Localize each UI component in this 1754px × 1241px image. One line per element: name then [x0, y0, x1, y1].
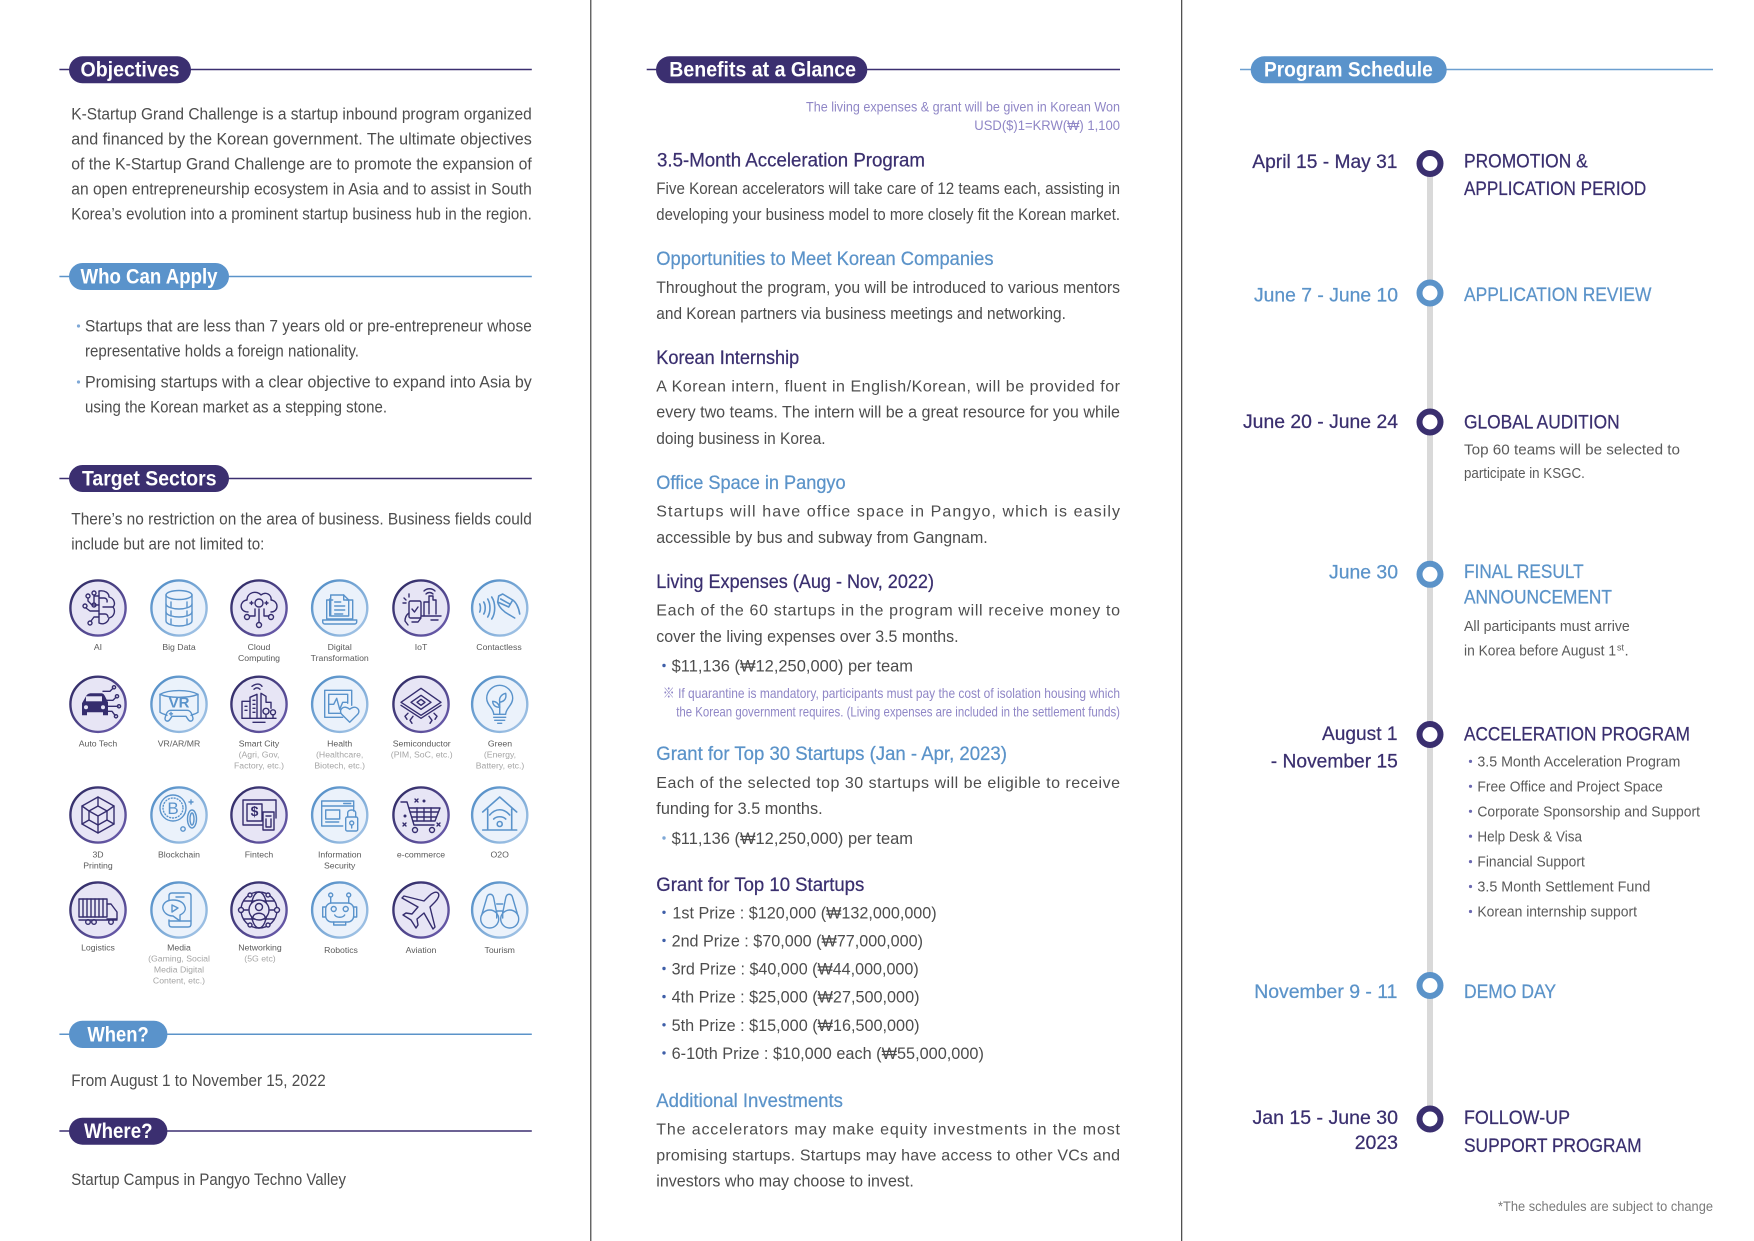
- icon: Logistics: [70, 882, 126, 952]
- icon: Health: [312, 677, 367, 770]
- icon: Blockchain: B: [167, 799, 179, 818]
- icon: AI: [70, 580, 126, 652]
- heading: Benefits at a Glance: Benefits at a Glance: [669, 58, 856, 82]
- milestone: acceleration program: Help Desk & Visa: [1477, 828, 1583, 846]
- block: additional investments: Additional Investments: [656, 1090, 843, 1112]
- icon: Networking: [231, 882, 287, 964]
- milestone: promotion: APPLICATION PERIOD: [1464, 178, 1646, 200]
- heading: Who Can Apply: [59, 263, 532, 290]
- list: eligibility: Startups that are less than 7 years old or pre-entrepreneur whose: [85, 318, 532, 336]
- icon: 3D Printing: [70, 787, 126, 870]
- icon: Robotics: [312, 882, 367, 955]
- icon: Tourism: Tourism: [484, 945, 515, 955]
- milestone: follow-up: Jan 15 - June 30: [1252, 1107, 1398, 1129]
- icon: VR/AR/MR: VR/AR/MR: [158, 738, 200, 748]
- icon: e-commerce: [393, 787, 449, 860]
- icon: Robotics: Robotics: [324, 945, 359, 955]
- block: meet Korean companies: [656, 248, 1120, 323]
- milestone: demo day: DEMO DAY: [1464, 981, 1556, 1003]
- icon: Cloud Computing: [231, 580, 287, 663]
- icon: Auto Tech: Auto Tech: [79, 738, 117, 748]
- icon: Smart City: [231, 677, 287, 770]
- note: currency: [806, 98, 1120, 133]
- icon: e-commerce: e-commerce: [397, 850, 445, 860]
- text: target sectors intro: include but are not limited to:: [71, 536, 264, 554]
- panel: program schedule: [1240, 56, 1713, 1214]
- block: grant top 10: 1st Prize : $120,000 (₩132,000,000): [672, 904, 937, 922]
- icon: Green: [472, 677, 527, 770]
- milestone: acceleration program: Free Office and Project Space: [1477, 778, 1663, 796]
- block: acceleration program: Five Korean accelerators will take care of 12 teams each, assisting in: [656, 180, 1120, 198]
- icon: Networking: (5G etc): [244, 954, 276, 964]
- note: currency: The living expenses & grant will be given in Korean Won: [806, 98, 1120, 114]
- icon: IoT: IoT: [415, 642, 428, 652]
- block: grant top 30: [656, 743, 1120, 848]
- icon: Smart City: (Agri, Gov,: [239, 750, 279, 760]
- block: grant top 10: [656, 874, 984, 1063]
- icon: Blockchain: [151, 787, 207, 860]
- block: office space: Startups will have office space in Pangyo, which is easily: [656, 504, 1120, 520]
- block: acceleration program: developing your business model to more closely fit the Korean market.: [656, 206, 1120, 224]
- icon: Digital Transformation: Digital: [328, 642, 352, 652]
- heading: Benefits at a Glance: [647, 56, 1120, 83]
- block: living expenses: Each of the 60 startups in the program will receive money to: [656, 602, 1120, 620]
- heading: Objectives: [59, 56, 532, 83]
- note: currency: USD($)1=KRW(₩) 1,100: [974, 117, 1120, 133]
- milestone: final result: .: [1624, 642, 1629, 660]
- block: grant top 30: funding for 3.5 months.: [656, 800, 823, 818]
- block: living expenses: the Korean government requires. (Living expenses are included in the settlement funds): [676, 704, 1120, 720]
- heading: When?: When?: [87, 1023, 149, 1046]
- text: when: From August 1 to November 15, 2022: [71, 1072, 326, 1090]
- milestone: demo day: November 9 - 11: [1254, 981, 1398, 1003]
- block: Korean internship: A Korean intern, fluent in English/Korean, will be provided for: [656, 378, 1121, 396]
- milestone: promotion: PROMOTION &: [1464, 150, 1588, 172]
- text: objectives description: Korea’s evolution into a prominent startup business hub in the region.: [71, 206, 532, 224]
- milestone: global audition: Top 60 teams will be selected to: [1464, 442, 1680, 458]
- icon: Green: Battery, etc.): [476, 760, 524, 770]
- milestone: final result: in Korea before August 1: [1464, 642, 1616, 660]
- icon: Digital Transformation: [311, 580, 369, 663]
- icon: Aviation: Aviation: [406, 945, 437, 955]
- milestone: demo day: [1254, 975, 1556, 1003]
- milestone: final result: [1329, 561, 1630, 660]
- heading: Who Can Apply: Who Can Apply: [80, 266, 218, 288]
- icon: VR/AR/MR: [151, 677, 207, 748]
- icon: O2O: O2O: [491, 850, 509, 860]
- icon: O2O: [472, 787, 527, 860]
- icon: Information Security: Security: [324, 860, 356, 870]
- milestone: follow-up: 2023: [1355, 1132, 1398, 1154]
- milestone: application review: [1254, 282, 1652, 306]
- heading: Program Schedule: [1240, 56, 1713, 83]
- block: additional investments: [656, 1090, 1121, 1190]
- block: living expenses: [656, 571, 1120, 720]
- milestone: acceleration program: Korean internship support: [1477, 904, 1638, 920]
- block: additional investments: promising startups. Startups may have access to other VCs and: [656, 1148, 1120, 1164]
- block: living expenses: cover the living expenses over 3.5 months.: [656, 628, 959, 646]
- heading: Target Sectors: Target Sectors: [82, 468, 216, 490]
- icon: Media: Media: [167, 942, 191, 952]
- milestone: global audition: [1243, 411, 1680, 482]
- text: objectives description: and financed by the Korean government. The ultimate objectives: [71, 130, 532, 148]
- icon: Contactless: [472, 580, 527, 652]
- icon: Auto Tech: [70, 677, 126, 748]
- milestone: application review: June 7 - June 10: [1254, 284, 1398, 306]
- icon: Blockchain: Blockchain: [158, 850, 200, 860]
- icon: Fintech: $: [251, 803, 259, 819]
- icon: Media: Content, etc.): [153, 976, 205, 986]
- milestone: final result: FINAL RESULT: [1464, 561, 1584, 583]
- milestone: global audition: GLOBAL AUDITION: [1464, 412, 1620, 434]
- milestone: promotion: [1252, 150, 1646, 200]
- icon: Smart City: Smart City: [239, 738, 280, 748]
- heading: Where?: Where?: [84, 1120, 152, 1143]
- block: Korean internship: doing business in Korea.: [656, 430, 826, 448]
- block: living expenses: ※ If quarantine is mandatory, participants must pay the cost of isolation housing which: [663, 685, 1120, 701]
- milestone: final result: June 30: [1329, 562, 1398, 584]
- block: additional investments: investors who may choose to invest.: [656, 1172, 914, 1190]
- milestone: acceleration program: 3.5 Month Acceleration Program: [1477, 754, 1680, 770]
- milestone: global audition: participate in KSGC.: [1464, 465, 1585, 482]
- milestone: acceleration program: Financial Support: [1477, 854, 1586, 870]
- icon: Semiconductor: Semiconductor: [393, 738, 451, 748]
- block: living expenses: Living Expenses (Aug - Nov, 2022): [656, 571, 934, 593]
- icon: Media: [148, 882, 210, 986]
- block: additional investments: The accelerators may make equity investments in the most: [656, 1122, 1121, 1138]
- list: eligibility: [77, 318, 533, 416]
- icon: Cloud Computing: Cloud: [248, 642, 271, 652]
- icon: IoT: [393, 580, 449, 652]
- list: eligibility: using the Korean market as a stepping stone.: [85, 398, 387, 416]
- icon: 3D Printing: Printing: [83, 860, 113, 870]
- icon: Contactless: Contactless: [476, 642, 522, 652]
- block: meet Korean companies: Opportunities to Meet Korean Companies: [656, 248, 994, 270]
- block: grant top 30: $11,136 (₩12,250,000) per team: [672, 830, 913, 848]
- icon: Fintech: Fintech: [245, 850, 273, 860]
- icon: Health: Biotech, etc.): [314, 760, 365, 770]
- icon: Information Security: [312, 787, 367, 870]
- text: objectives description: [71, 106, 532, 224]
- milestone: final result: st: [1617, 642, 1624, 652]
- block: grant top 30: Each of the selected top 30 startups will be eligible to receive: [656, 775, 1120, 792]
- block: grant top 10: Grant for Top 10 Startups: [656, 874, 865, 896]
- milestone: final result: All participants must arrive: [1464, 618, 1630, 635]
- heading: Objectives: Objectives: [80, 58, 180, 82]
- icon: 3D Printing: 3D: [92, 850, 104, 860]
- icon: Digital Transformation: Transformation: [311, 653, 369, 663]
- block: grant top 10: 2nd Prize : $70,000 (₩77,000,000): [672, 932, 923, 950]
- milestone: acceleration program: August 1: [1322, 723, 1398, 745]
- block: acceleration program: [656, 150, 1120, 224]
- icon: Logistics: Logistics: [81, 942, 116, 952]
- panel: benefits: [647, 56, 1121, 1190]
- block: acceleration program: 3.5-Month Acceleration Program: [657, 150, 925, 172]
- block: office space: Office Space in Pangyo: [656, 472, 846, 494]
- block: meet Korean companies: Throughout the program, you will be introduced to various mentors: [656, 279, 1120, 297]
- icon: Green: Green: [488, 738, 512, 748]
- icon: Fintech: [231, 787, 287, 860]
- icon: Health: Health: [327, 738, 352, 748]
- block: grant top 10: 3rd Prize : $40,000 (₩44,000,000): [672, 960, 919, 978]
- milestone: follow-up: [1252, 1107, 1642, 1157]
- list: eligibility: representative holds a foreign nationality.: [85, 342, 359, 360]
- text: target sectors intro: There’s no restriction on the area of business. Business fields could: [71, 510, 532, 528]
- icon: Tourism: [472, 882, 527, 955]
- milestone: acceleration program: - November 15: [1271, 750, 1398, 772]
- block: office space: [656, 472, 1120, 547]
- milestone: follow-up: SUPPORT PROGRAM: [1464, 1135, 1642, 1157]
- icon: Media: Media Digital: [154, 964, 204, 974]
- milestone: acceleration program: ACCELERATION PROGRAM: [1464, 724, 1690, 746]
- heading: Where?: [59, 1118, 532, 1145]
- icon: Networking: Networking: [238, 942, 282, 952]
- icon: Green: (Energy,: [484, 750, 516, 760]
- block: grant top 10: 5th Prize : $15,000 (₩16,500,000): [672, 1017, 920, 1035]
- heading: Program Schedule: Program Schedule: [1264, 58, 1433, 82]
- timeline spine: [1427, 163, 1433, 1119]
- text: objectives description: an open entrepreneurship ecosystem in Asia and to assist in South: [71, 180, 532, 198]
- milestone: acceleration program: Corporate Sponsorship and Support: [1477, 804, 1701, 820]
- icon: Cloud Computing: Computing: [238, 653, 280, 663]
- block: Korean internship: Korean Internship: [656, 347, 799, 369]
- icon: Big Data: [151, 580, 207, 652]
- text: where: Startup Campus in Pangyo Techno Valley: [71, 1171, 347, 1189]
- icon: Semiconductor: [391, 677, 453, 760]
- milestone: follow-up: FOLLOW-UP: [1464, 1107, 1570, 1129]
- block: grant top 10: 4th Prize : $25,000 (₩27,500,000): [672, 988, 920, 1006]
- icon: Smart City: Factory, etc.): [234, 760, 284, 770]
- block: grant top 30: Grant for Top 30 Startups (Jan - Apr, 2023): [656, 743, 1007, 765]
- list: eligibility: Promising startups with a clear objective to expand into Asia by: [85, 374, 533, 392]
- milestone: global audition: June 20 - June 24: [1243, 411, 1398, 433]
- milestone: application review: APPLICATION REVIEW: [1464, 284, 1652, 306]
- text: objectives description: of the K-Startup Grand Challenge are to promote the expansion of: [71, 156, 532, 174]
- block: Korean internship: every two teams. The intern will be a great resource for you while: [656, 404, 1120, 422]
- heading: Target Sectors: [59, 465, 532, 492]
- block: office space: accessible by bus and subway from Gangnam.: [656, 529, 988, 547]
- milestone: final result: ANNOUNCEMENT: [1464, 586, 1612, 608]
- panel: left column: [59, 56, 533, 1189]
- text: objectives description: K-Startup Grand Challenge is a startup inbound program organized: [71, 106, 532, 124]
- milestone: promotion: April 15 - May 31: [1252, 151, 1398, 173]
- text: target sectors intro: [71, 510, 532, 554]
- footnote: *The schedules are subject to change: [1498, 1198, 1713, 1214]
- icon: Semiconductor: (PIM, SoC, etc.): [391, 750, 453, 760]
- block: living expenses: $11,136 (₩12,250,000) per team: [672, 658, 913, 676]
- icon: Information Security: Information: [318, 850, 362, 860]
- icon: VR/AR/MR: VR: [169, 694, 190, 711]
- icon: Health: (Healthcare,: [316, 750, 363, 760]
- block: Korean internship: [656, 347, 1121, 448]
- icon: Big Data: Big Data: [162, 642, 196, 652]
- block: grant top 10: 6-10th Prize : $10,000 each (₩55,000,000): [672, 1045, 984, 1063]
- block: meet Korean companies: and Korean partners via business meetings and networking.: [656, 305, 1066, 323]
- icon: Aviation: [393, 882, 449, 955]
- heading: When?: [59, 1021, 532, 1048]
- icon: Media: (Gaming, Social: [148, 954, 210, 964]
- milestone: acceleration program: 3.5 Month Settlement Fund: [1477, 878, 1650, 896]
- icon: AI: AI: [94, 642, 102, 652]
- milestone: acceleration program: [1271, 723, 1701, 920]
